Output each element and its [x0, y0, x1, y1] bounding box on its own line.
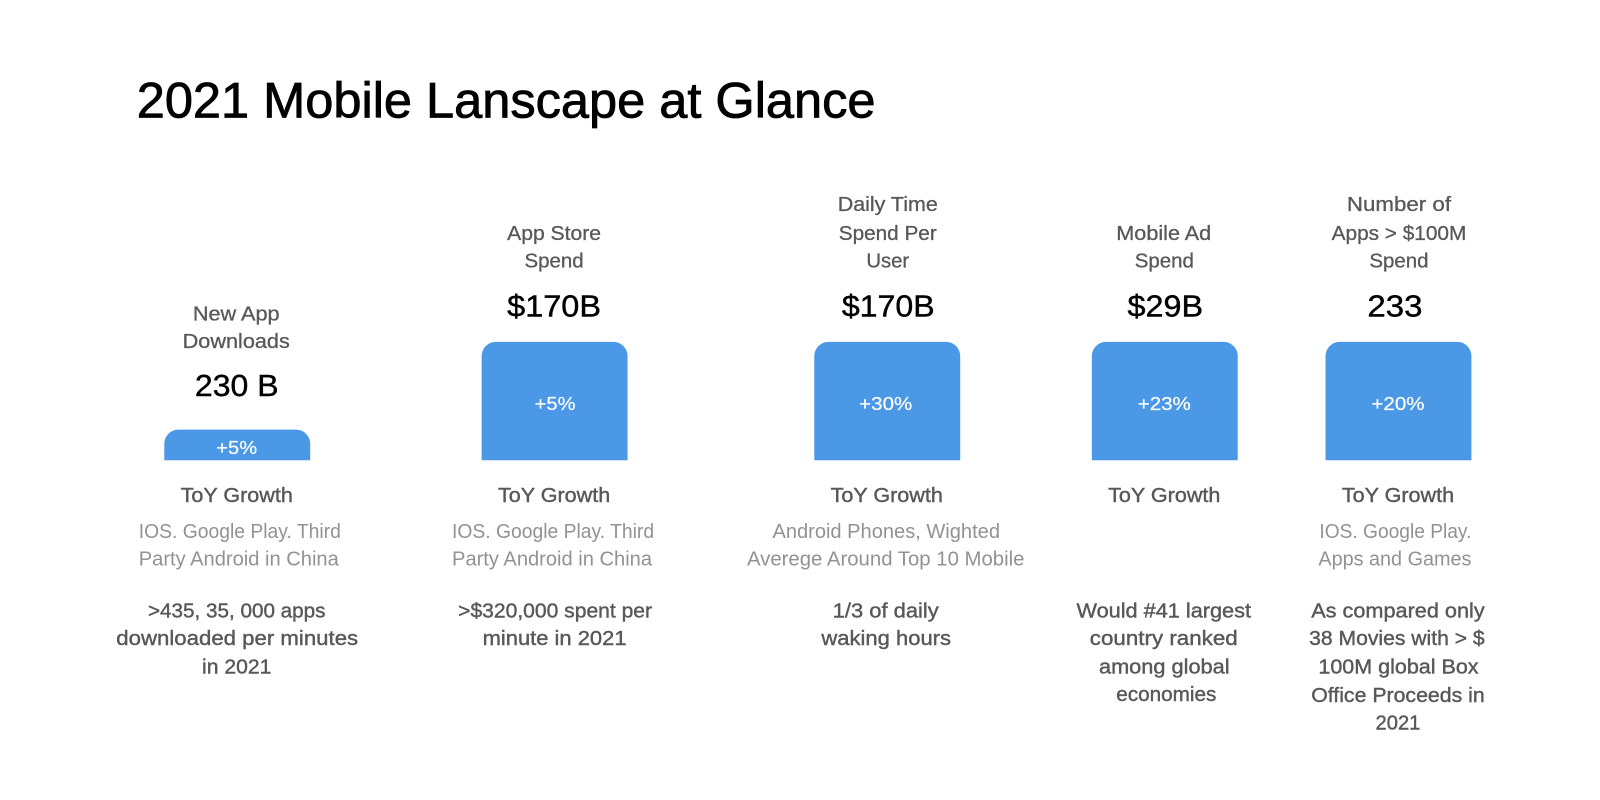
bar: +5% [482, 342, 628, 460]
note: >$320,000 spent per [458, 600, 652, 622]
value: $170B: $170B [842, 289, 935, 323]
growth label: ToY Growth [1108, 485, 1220, 507]
heading: mobile ad spend: Mobile Ad [1116, 223, 1211, 245]
value: $170B: $170B [507, 289, 601, 323]
note: economies [1116, 684, 1216, 706]
column: number of apps over $100M spend [1309, 194, 1486, 735]
heading: new app downloads: Downloads [183, 331, 290, 353]
description: IOS. Google Play. Third [139, 521, 341, 543]
heading: daily time spend per user: User [866, 250, 909, 272]
description [452, 521, 654, 570]
description: IOS. Google Play. [1319, 521, 1471, 543]
column: app store spend [452, 223, 654, 650]
note [820, 600, 951, 650]
growth label: ToY Growth [831, 485, 943, 507]
bar: +23% [1092, 342, 1238, 460]
note: 100M global Box [1318, 656, 1479, 678]
description: Averege Around Top 10 Mobile [747, 548, 1024, 570]
heading: daily time spend per user: Spend Per [839, 223, 937, 245]
heading: new app downloads: New App [193, 303, 280, 325]
bar: +5% [164, 430, 310, 460]
description: Apps and Games [1318, 548, 1471, 570]
note: 38 Movies with > $ [1309, 628, 1485, 650]
note: 2021 [1376, 713, 1420, 735]
bar: +30% [814, 342, 960, 460]
column: new app downloads [116, 303, 358, 678]
description: Party Android in China [452, 548, 653, 570]
note: Office Proceeds in [1311, 685, 1485, 707]
bar: +5%: +5% [216, 437, 257, 458]
note: in 2021 [202, 656, 271, 678]
note: among global [1099, 656, 1230, 678]
growth label: ToY Growth [181, 485, 293, 507]
bar: +23%: +23% [1138, 393, 1191, 414]
bar: +5%: +5% [535, 393, 576, 414]
heading: app store spend: App Store [507, 223, 601, 245]
note: Would #41 largest [1077, 600, 1251, 622]
heading: mobile ad spend: Spend [1135, 250, 1194, 272]
description [139, 521, 341, 570]
heading: daily time spend per user: Daily Time [838, 194, 938, 216]
heading: daily time spend per user [838, 194, 938, 272]
heading: mobile ad spend [1116, 223, 1211, 272]
heading: number of apps: Apps > $100M [1332, 223, 1466, 245]
heading: app store spend: Spend [524, 250, 584, 272]
description [1318, 521, 1471, 570]
column: daily time spend per user [747, 194, 1024, 650]
bar: +20%: +20% [1371, 393, 1424, 414]
heading: app store spend [507, 223, 601, 272]
heading: new app downloads [183, 303, 290, 353]
note: minute in 2021 [483, 628, 627, 650]
growth label: ToY Growth [1342, 485, 1454, 507]
growth label: ToY Growth [498, 485, 610, 507]
bar: +20% [1326, 342, 1471, 460]
note [458, 600, 652, 650]
title: 2021 Mobile Lanscape at Glance [137, 72, 876, 128]
description: Android Phones, Wighted [772, 521, 1000, 543]
note: downloaded per minutes [116, 628, 358, 650]
heading: number of apps: Spend [1369, 250, 1429, 272]
bar: +30%: +30% [859, 393, 912, 414]
note [1309, 600, 1486, 735]
note: 1/3 of daily [833, 600, 940, 622]
description: Party Android in China [139, 548, 339, 570]
heading: number of apps: Number of [1347, 194, 1451, 216]
value: 233: 233 [1367, 289, 1422, 323]
value: 230 B: 230 B [195, 369, 279, 403]
note: country ranked [1090, 628, 1238, 650]
column: mobile ad spend [1077, 223, 1251, 706]
note: >435, 35, 000 apps [148, 600, 326, 622]
note: waking hours [820, 628, 951, 650]
note: As compared only [1311, 600, 1486, 622]
value: $29B: $29B [1128, 289, 1203, 323]
description [747, 521, 1024, 570]
heading: number of apps [1332, 194, 1466, 272]
note [1077, 600, 1251, 706]
description: IOS. Google Play. Third [452, 521, 654, 543]
note [116, 600, 358, 678]
